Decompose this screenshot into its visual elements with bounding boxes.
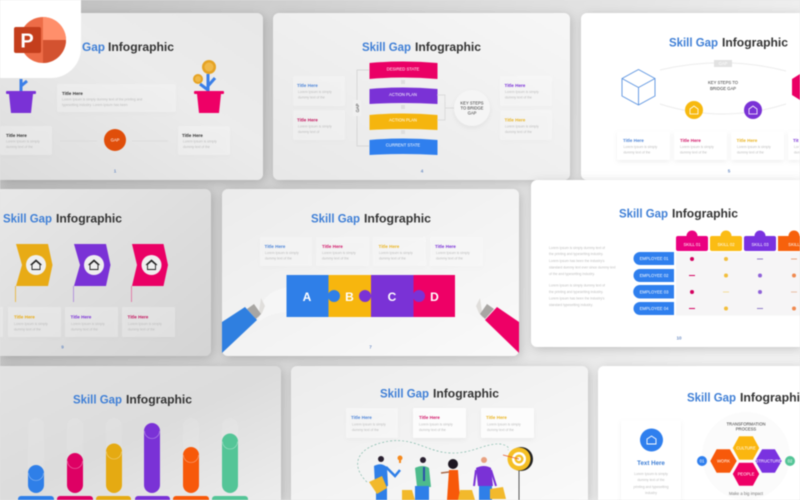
- card: yellow title: [373, 237, 426, 266]
- hexagon: culture: [732, 436, 760, 460]
- gap bracket: [353, 70, 369, 146]
- body text: standard dummy text ever since dummy text: [549, 266, 616, 270]
- hexagon: work: WORK: [717, 458, 730, 464]
- title: Infographic: [722, 36, 788, 50]
- left arm: [222, 298, 265, 353]
- panel: slide 1 plants: [0, 13, 263, 180]
- card 1: dummy text of the: [624, 150, 651, 154]
- title: Skill Gap: [687, 390, 736, 404]
- card: blue title: Title Here: [351, 415, 372, 420]
- table markers: [689, 257, 797, 310]
- title: [73, 392, 192, 406]
- page number: 5: [728, 168, 731, 174]
- skill header 3: SKILL 03: [751, 242, 769, 247]
- right arm: [476, 298, 519, 353]
- card: pink title: dummy text of the: [419, 428, 446, 432]
- hexagon: structure: STRUCTURE: [756, 458, 782, 464]
- right text card: Title Here: [182, 133, 203, 138]
- hexagon: people: PEOPLE: [738, 472, 755, 476]
- figure: person with bulb: [369, 456, 402, 500]
- process label: TRANSFORMATION: [726, 422, 766, 426]
- title: Infographic: [433, 386, 499, 400]
- card: purple title: dummy text of the: [505, 96, 532, 100]
- gap connector: [60, 140, 168, 142]
- card: yellow title: [8, 307, 61, 337]
- ribbon: current state: [370, 138, 438, 155]
- card: pink title: Lorem Ipsum is simply: [419, 422, 453, 426]
- title: Skill Gap: [619, 206, 668, 220]
- skill header 1: [676, 230, 708, 251]
- card 1: [617, 131, 670, 160]
- card: purple title: [500, 76, 552, 106]
- right text card: Lorem Ipsum is simply: [183, 140, 217, 144]
- card: yellow title: Lorem Ipsum is simply: [379, 251, 413, 255]
- card: pink title: [293, 110, 345, 140]
- powerpoint badge: [0, 0, 81, 78]
- title: [311, 212, 431, 226]
- card: pink title: Title Here: [297, 118, 318, 122]
- card: yellow title: Lorem Ipsum is simply: [14, 322, 48, 326]
- body text: the printing and typesetting industry.: [549, 252, 603, 256]
- card: pink title: dummy text of the: [322, 256, 349, 260]
- body text: Lorem Ipsum has been the industry's: [549, 259, 605, 263]
- right text card: dummy text of the: [183, 145, 210, 149]
- gap bracket: GAP: [355, 103, 360, 112]
- icon: purple home: [744, 101, 762, 119]
- puzzle pieces: [286, 275, 455, 317]
- card: yellow title: Title Here: [486, 415, 507, 420]
- card: pink title: [413, 408, 466, 438]
- bar labels: [18, 496, 248, 500]
- hexagon: work: [710, 449, 737, 473]
- body text: standard typesetting industry.: [549, 303, 593, 307]
- text here card: industry: [645, 491, 657, 495]
- card: yellow title: Title Here: [504, 118, 526, 122]
- key steps circle: KEY STEPS: [460, 100, 484, 106]
- card: yellow title: Lorem Ipsum is simply: [505, 124, 539, 128]
- title: [619, 206, 738, 220]
- panel: slide 9 hexagon process: [598, 366, 800, 500]
- key steps circle: TO BRIDGE: [461, 106, 484, 110]
- card: pink title: dummy text of the: [128, 328, 155, 332]
- card: blue title: dummy text of the: [265, 256, 292, 260]
- body text: the printing and typesetting industry.: [549, 290, 603, 294]
- text here card: dummy text of the: [638, 478, 665, 482]
- title: Infographic: [672, 206, 738, 220]
- bar: blue: [28, 465, 44, 493]
- card: purple title: Lorem Ipsum is simply: [71, 322, 105, 326]
- title: Skill Gap: [669, 36, 718, 50]
- text here card: printing and typesetting: [633, 485, 669, 489]
- bar: purple: [144, 423, 160, 493]
- ribbon: action plan 1: ACTION PLAN: [389, 92, 417, 97]
- icon: pink plant pot with coins: [193, 60, 224, 113]
- piece C: C: [388, 290, 397, 304]
- piece D: [413, 275, 455, 317]
- title: Infographic: [108, 40, 174, 54]
- card: pink title: Lorem Ipsum is simply: [298, 124, 332, 128]
- flag: pink: [132, 244, 168, 302]
- body text: of the and typesetting industry.: [549, 272, 595, 276]
- card: pink title: Lorem Ipsum is simply: [128, 322, 162, 326]
- icon: home circle: [640, 428, 663, 452]
- bar: pink: [67, 453, 83, 493]
- icon: powerpoint logo: P: [20, 30, 34, 52]
- card 1: Title Here: [623, 138, 644, 143]
- flag: yellow: [16, 244, 52, 302]
- bar: orange: [183, 447, 199, 493]
- ribbon: action plan 2: [370, 114, 438, 130]
- title: Infographi: [740, 390, 800, 404]
- title: Skill Gap: [311, 212, 360, 226]
- title: Skill Gap: [3, 212, 52, 226]
- card: pink title: Title Here: [419, 415, 440, 420]
- card: blue title: Title Here: [297, 83, 318, 88]
- card: blue title: Lorem Ipsum is simply: [265, 251, 299, 255]
- ribbon: action plan 1: [370, 88, 438, 104]
- card: yellow title: Title Here: [378, 244, 400, 249]
- title: Skill Gap: [362, 40, 411, 54]
- card: blue title: [260, 237, 312, 266]
- card: blue title: Lorem Ipsum is simply: [298, 90, 332, 94]
- bar tracks: [28, 418, 238, 493]
- card 2: dummy text of the: [680, 150, 707, 154]
- bar: green: [222, 434, 238, 493]
- page number: 10: [676, 336, 682, 340]
- card 3: [731, 131, 784, 160]
- panel: slide 7 bar chart: [0, 366, 281, 500]
- hexagon: structure: [755, 449, 782, 473]
- card: yellow title: dummy text of the: [379, 256, 406, 260]
- title: Infographic: [56, 212, 122, 226]
- card: purple title: dummy text of the: [71, 328, 98, 332]
- left text card: Title Here: [6, 133, 27, 138]
- card: yellow title: [481, 408, 534, 438]
- piece A: [286, 275, 328, 317]
- text here card: Text Here: [637, 460, 665, 467]
- right text card: [178, 126, 230, 155]
- body text: Lorem Ipsum has been the industry's: [549, 296, 605, 300]
- hexagon: people: [732, 462, 760, 486]
- card 4: Lor: [794, 145, 800, 149]
- employee 01: EMPLOYEE 01: [640, 256, 669, 261]
- title: [362, 40, 481, 54]
- card: blue title: Lorem Ipsum is simply: [352, 422, 386, 426]
- figure: person in green: [402, 457, 431, 500]
- card: purple title: Lorem Ipsum is simply: [505, 90, 539, 94]
- key steps bracket: [437, 95, 455, 120]
- card: pink title: Lorem Ipsum is simply: [322, 251, 356, 255]
- panel: slide 6 skills table: [531, 180, 800, 347]
- card 4: [788, 131, 800, 160]
- card: pink title: Title Here: [322, 244, 343, 249]
- title: Infographic: [126, 392, 192, 406]
- card: pink title: [122, 307, 175, 337]
- text here card: [621, 420, 681, 500]
- page number: 4: [421, 168, 424, 174]
- panel: slide 3 key steps loop: [581, 13, 800, 180]
- card: yellow title: dummy text of the: [14, 328, 41, 332]
- piece A: A: [303, 290, 312, 304]
- card: yellow title: [500, 110, 552, 140]
- employee rows: [633, 252, 674, 315]
- gap tag: GAP: [719, 61, 728, 66]
- icon: purple plant pot: [6, 79, 36, 113]
- title: Infographic: [415, 40, 481, 54]
- key steps circle: GAP: [468, 110, 477, 116]
- card 4: dun: [794, 150, 800, 154]
- left text card: [0, 126, 52, 155]
- gap circle: [104, 129, 126, 151]
- skill header 2: [710, 230, 742, 251]
- ribbon: current state: CURRENT STATE: [386, 142, 420, 148]
- backdrop circle: [702, 412, 790, 500]
- card: purple title: Title Here: [504, 83, 526, 88]
- dashed path: [358, 441, 509, 482]
- title: [3, 212, 122, 226]
- title: Infographic: [364, 212, 431, 226]
- title: [669, 36, 788, 50]
- card: pink title: [316, 237, 369, 266]
- soft hands: [259, 287, 482, 322]
- top text card: [57, 84, 176, 112]
- icon: target: [503, 447, 533, 500]
- employee 04: EMPLOYEE 04: [640, 306, 669, 311]
- panel: slide 4 flags: [0, 189, 211, 356]
- skill header 4: [778, 230, 800, 251]
- card 3: Title Here: [736, 138, 758, 143]
- node: blue: 01: [700, 458, 705, 464]
- top text card: Title Here: [62, 91, 83, 96]
- text here card: Lorem Ipsum is simply: [634, 472, 668, 476]
- process label: [726, 422, 766, 432]
- card: purple title: [65, 307, 118, 337]
- impact note: Make a big impact: [729, 491, 764, 496]
- employee 03: EMPLOYEE 03: [640, 290, 669, 294]
- panel: slide 8 team and target: [291, 366, 588, 500]
- node: green: 02: [788, 458, 793, 464]
- title: Skill Gap: [380, 386, 429, 400]
- card: purple title: [430, 237, 483, 266]
- icon: wireframe cube: [622, 70, 655, 105]
- piece B: B: [345, 290, 354, 304]
- card 2: [674, 131, 727, 160]
- ribbon: action plan 2: ACTION PLAN: [389, 118, 417, 122]
- bar: yellow: [106, 444, 122, 493]
- key steps label: BRIDGE GAP: [710, 86, 736, 91]
- skill header 1: SKILL 01: [683, 242, 701, 247]
- title: [687, 390, 800, 404]
- process label: PROCESS: [736, 426, 756, 432]
- icon: yellow home: [685, 101, 703, 119]
- card: blue title: [346, 408, 398, 438]
- node: green: [785, 456, 795, 466]
- card: blue title: Title Here: [264, 244, 286, 249]
- top text card: Lorem Ipsum is simply dummy text of the printing and: [62, 98, 142, 102]
- panel: slide 5 puzzle: [222, 189, 519, 356]
- title: Skill Gap: [73, 392, 122, 406]
- card: yellow title: dummy text of the: [505, 130, 532, 134]
- card: yellow title: Lorem Ipsum is simply: [487, 422, 521, 426]
- card 2: Lorem Ipsum is simply: [680, 145, 714, 149]
- top text card: typesetting industry. Lorem Ipsum has been: [62, 103, 128, 107]
- key steps label: [708, 80, 739, 91]
- card: purple title: Title Here: [70, 314, 92, 320]
- card: yellow title: dummy text of the: [487, 428, 514, 432]
- figure: woman in orange: [441, 459, 475, 500]
- gap tag: [714, 60, 732, 67]
- page number: 7: [369, 344, 372, 350]
- card 3: dummy text of the: [737, 150, 764, 154]
- step arrows: [401, 80, 405, 134]
- card: blue title: dummy text of the: [352, 428, 379, 432]
- card 3: Lorem Ipsum is simply: [737, 145, 771, 149]
- card: purple title: Title Here: [435, 244, 456, 249]
- page number: 9: [61, 344, 64, 350]
- card: blue title: [293, 76, 345, 106]
- employee 02: EMPLOYEE 02: [640, 273, 669, 278]
- card: partial: [0, 307, 3, 337]
- title: Gap: [82, 40, 105, 54]
- card 1: Lorem Ipsum is simply: [624, 145, 658, 149]
- card: pink title: Title Here: [128, 314, 149, 320]
- card 4: Tit: [793, 138, 799, 143]
- card: yellow title: Title Here: [14, 314, 35, 320]
- panel: slide 2 ribbon stages: [273, 13, 570, 180]
- node: blue: [697, 456, 707, 466]
- card: purple title: dummy text of the: [436, 256, 463, 260]
- figure: person in purple: [474, 457, 506, 500]
- body text: [549, 246, 616, 307]
- ribbon: desired state: DESIRED STATE: [387, 66, 420, 72]
- icon: pink hexagon: [792, 74, 800, 100]
- ribbon: desired state: [370, 62, 438, 79]
- card: blue title: dummy text of the: [298, 96, 325, 100]
- key steps label: KEY STEPS TO: [708, 80, 739, 85]
- skill header 4: SKILL: [788, 242, 800, 247]
- loop arcs: [660, 63, 786, 114]
- card 2: Title Here: [680, 138, 701, 143]
- title: [380, 386, 499, 400]
- page number: 1: [114, 168, 117, 174]
- body text: Lorem Ipsum is simply dummy text of: [549, 284, 605, 288]
- hexagon: culture: CULTURE: [736, 446, 756, 450]
- piece C: [359, 275, 414, 317]
- body text: Lorem Ipsum is simply dummy text of: [549, 246, 605, 250]
- card: pink title: dummy text of: [298, 130, 319, 134]
- left text card: dummy text of the: [6, 145, 33, 149]
- skill header 3: [744, 230, 776, 251]
- piece B: [328, 275, 371, 317]
- table background: [676, 252, 800, 316]
- card: purple title: Lorem Ipsum is simply: [436, 251, 470, 255]
- piece D: D: [430, 290, 439, 304]
- key steps circle: [454, 90, 490, 126]
- flag: purple: [74, 244, 110, 302]
- skill header 2: SKILL 02: [717, 242, 735, 247]
- gap circle: GAP: [111, 138, 120, 142]
- left text card: Lorem Ipsum is simply: [6, 140, 40, 144]
